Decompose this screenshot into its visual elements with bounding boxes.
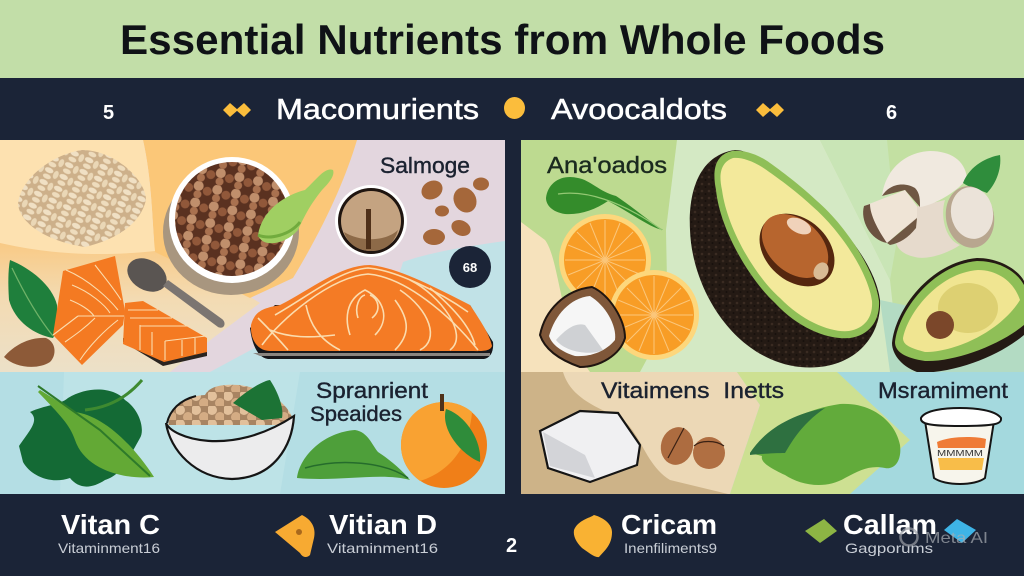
green spoon <box>258 170 333 243</box>
mushroom <box>863 151 1000 258</box>
title banner <box>0 0 1024 78</box>
number 2: 2 <box>506 535 517 557</box>
footer item: Cricam: Inenfiliments9 <box>624 540 717 556</box>
title banner: Essential Nutrients from Whole Foods <box>120 16 885 63</box>
panel: avocados and healthy fats <box>521 140 1024 373</box>
panel: macronutrients <box>0 140 505 372</box>
footer item: Vitan C: Vitaminment16 <box>58 540 160 556</box>
number badge <box>449 246 491 288</box>
icon: green diamond <box>805 519 837 543</box>
nut circle <box>335 185 407 257</box>
mushroom leaf <box>963 155 1000 193</box>
label: Anaoados: Ana'oados <box>547 152 667 178</box>
salmon chunk right <box>123 301 207 366</box>
panel: spinach and legumes strip <box>0 372 505 494</box>
footer item: Cricam <box>621 509 717 556</box>
footer item: Vitian D: Vitian D <box>329 509 437 540</box>
watermark: Meta AI: Meta AI <box>925 530 988 547</box>
footer item: Vitian D: Vitaminment16 <box>327 540 438 556</box>
label: Salmoge: Salmoge <box>380 153 470 178</box>
section header bar: 5 <box>103 102 114 124</box>
lentil bowl <box>163 157 299 295</box>
salmon fillet <box>250 265 493 359</box>
orange <box>401 394 487 488</box>
icon: orange nugget <box>574 515 612 557</box>
footer item: Vitian D <box>327 509 438 556</box>
label: Msramiment: Msramiment <box>878 378 1008 403</box>
spinach leaf <box>546 177 663 230</box>
dark spoon <box>121 252 225 328</box>
section header bar: Avoocaldots <box>551 94 727 126</box>
leaf <box>8 260 57 338</box>
label: Spranrient Speaides: Speaides <box>310 403 402 426</box>
watermark: Meta AI <box>900 528 988 547</box>
spinach bunch <box>19 380 154 487</box>
hazelnuts <box>657 424 725 469</box>
salmon chunk left <box>53 256 125 365</box>
section header bar <box>103 94 897 126</box>
icon: double diamond left <box>223 103 251 117</box>
footer item: Cricam: Cricam <box>621 509 717 540</box>
label: Spranrient Speaides: Spranrient <box>316 378 428 403</box>
spinach leaf <box>297 430 410 480</box>
small nuts <box>418 177 489 245</box>
footer item: Vitan C <box>58 509 160 556</box>
number badge: 68 <box>463 260 477 275</box>
icon: blue diamond <box>944 519 976 543</box>
label: Vitaimens Inetts: Vitaimens Inetts <box>601 378 784 403</box>
small avocado <box>892 258 1024 373</box>
section header bar: Macomurients <box>276 94 479 126</box>
footer item: Callam: Callam <box>843 509 937 540</box>
large avocado <box>690 150 880 368</box>
almond <box>4 338 55 367</box>
chickpea bowl <box>166 380 294 479</box>
yogurt cup <box>921 408 1001 484</box>
coconut <box>540 287 625 367</box>
footer item: Callam: Gagporums <box>845 540 933 556</box>
green leaf blob <box>750 404 900 485</box>
footer item: Callam <box>843 509 937 556</box>
yogurt cup: MMMMM <box>937 449 983 458</box>
panel: vitamins and minerals strip <box>521 372 1024 494</box>
tofu block <box>540 411 640 482</box>
footer item: Vitan C: Vitan C <box>61 509 160 540</box>
label: Spranrient Speaides <box>310 378 428 426</box>
orange slice back <box>559 214 651 306</box>
orange slice front <box>609 270 699 360</box>
section header bar: 6 <box>886 102 897 124</box>
icon: orange wedge <box>275 515 314 557</box>
grain pile <box>18 150 146 247</box>
